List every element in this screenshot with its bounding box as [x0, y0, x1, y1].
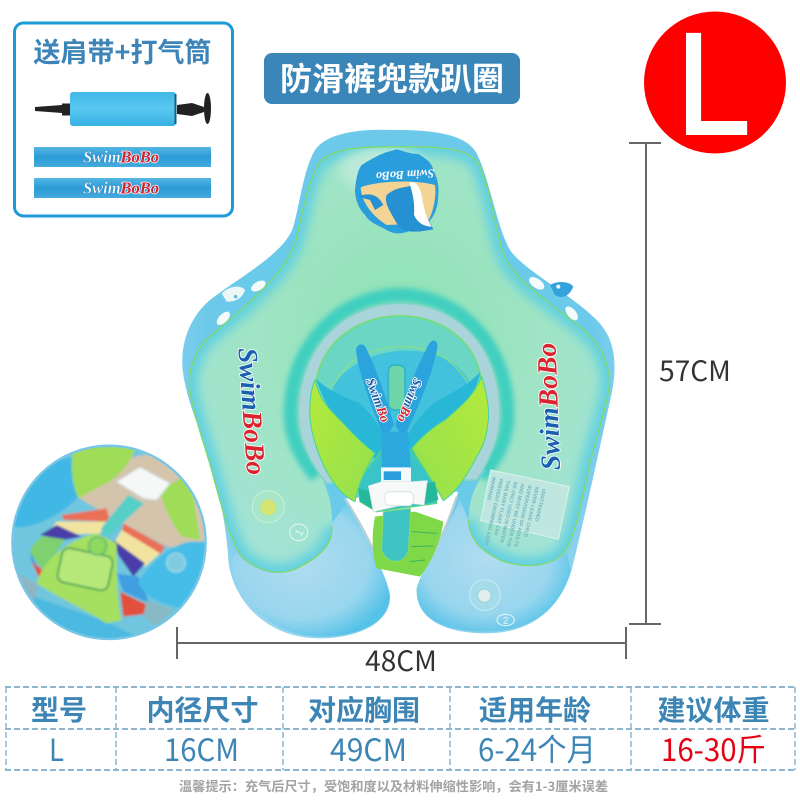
small dolphin left: [222, 287, 245, 302]
table value row: 49CM: [330, 725, 407, 770]
float outer body: [182, 130, 615, 638]
accessories heading: 送肩带+打气筒: [34, 31, 211, 70]
size badge L: [644, 4, 786, 165]
white buckle: [117, 467, 170, 500]
table header row: 内径尺寸: [146, 689, 259, 729]
warning label: [475, 470, 569, 556]
right leg translucent edge: [428, 497, 457, 563]
trunks yellow band right: [115, 530, 160, 567]
table header row: 型号: [31, 689, 87, 729]
table header row: 对应胸围: [308, 689, 420, 729]
swim float product: [182, 130, 615, 638]
cloud left top: [249, 278, 267, 294]
shoulder strap 2: SwimBoBo: [83, 178, 159, 198]
warning label: THIS BABY FLOAT CAN: [492, 480, 511, 536]
logo dolphin small: [357, 194, 383, 210]
left webbing: [358, 488, 373, 508]
width dimension 48CM: [177, 627, 626, 680]
behind-buckle teal backing: [358, 450, 437, 512]
trunks red band upper: [62, 508, 110, 522]
trunks green band left: [30, 536, 65, 570]
dolphin logo: [355, 149, 439, 233]
trunks red band right: [122, 523, 165, 555]
left chamber number 1: [290, 524, 308, 541]
right green cushion: [412, 377, 489, 501]
logo dolphin belly: [409, 182, 432, 227]
trunks yellow band left: [47, 522, 107, 535]
right strap brand text: SwimBo: [394, 376, 425, 425]
shoulder strap 1: [34, 147, 211, 167]
footnote: 温馨提示：充气后尺寸，受饱和度以及材料伸缩性影响，会有1-3厘米误差: [179, 776, 608, 795]
left leg translucent edge: [345, 498, 380, 567]
left brand text: SwimBoBo: [232, 347, 272, 476]
teal strap: [101, 495, 144, 536]
left strap brand text: SwimBo: [363, 376, 393, 424]
warning label: NEVER LEAVE CHILD: [522, 486, 539, 538]
float valve: [167, 553, 185, 572]
cloud left bottom: [214, 309, 232, 327]
lower right grey water: [143, 600, 173, 627]
table value row: [49, 725, 766, 770]
soft edge glow inside panel: [189, 147, 609, 572]
seat interior: [315, 316, 482, 483]
trunks purple band left: [40, 525, 82, 540]
warning label: WARNING: [485, 476, 497, 501]
warning label: UNATTENDED: [533, 488, 547, 523]
seat opening ring: [298, 303, 500, 483]
cloud right top: [527, 275, 546, 292]
trunks blue band left: [30, 552, 36, 566]
right brand text: SwimBoBo: [531, 342, 566, 471]
flap snap: [89, 537, 107, 555]
height dimension 57CM: [629, 143, 731, 624]
green inner panel: [189, 147, 609, 572]
width dimension 48CM: 48CM: [365, 640, 437, 680]
icon: air pump: [35, 92, 211, 126]
flap stitch lines: [410, 532, 437, 562]
green panel stroke: [189, 147, 609, 572]
title banner: 防滑裤兜款趴圈: [280, 54, 504, 100]
logo dolphin: [386, 185, 433, 232]
left V strap: [356, 344, 394, 435]
green flap: [37, 533, 122, 623]
lower water: [32, 596, 134, 638]
table header row: 建议体重: [657, 689, 770, 729]
inset photo: crotch strap in use: [11, 444, 207, 640]
right V strap: [395, 341, 438, 433]
trunks purple band right: [113, 540, 145, 577]
specification table: [5, 687, 796, 770]
flap pocket: [56, 547, 114, 592]
shoulder strap 1: SwimBoBo: [83, 148, 159, 166]
right teal frill: [408, 372, 481, 463]
green crotch flap: [373, 512, 443, 577]
small dolphin right: [550, 282, 573, 297]
table value row: 6-24个月: [478, 725, 596, 770]
height dimension 57CM: 57CM: [659, 350, 731, 390]
table header row: [31, 689, 770, 729]
table value row: 16CM: [164, 725, 239, 770]
size badge L: L: [676, 4, 750, 165]
logo upside-down brand: Swim BoBo: [376, 166, 435, 183]
right chamber number 2: [497, 614, 514, 627]
left teal frill: [316, 378, 383, 463]
torso skin: [77, 450, 207, 550]
table header row: 适用年龄: [479, 689, 591, 729]
centre strap: [382, 432, 411, 468]
grey ground left: [19, 574, 38, 601]
right leg shade: [417, 500, 571, 632]
seat inner arc: [329, 347, 470, 393]
blue float lower right: [138, 542, 213, 608]
shoulder strap 2: [34, 178, 211, 198]
cloud right bottom: [563, 304, 580, 323]
left green cushion: [310, 380, 375, 502]
seat mesh centre: [330, 350, 470, 450]
trunks red band lower right: [120, 592, 150, 617]
table value row: 16-30斤: [661, 725, 766, 770]
table value row: L: [49, 725, 64, 770]
right valve: [470, 580, 500, 610]
lower teal strap: [382, 508, 411, 561]
panel: accessories: [14, 23, 232, 216]
right webbing: [425, 482, 438, 503]
left valve: [252, 491, 284, 523]
right chamber number 2: 2: [503, 616, 509, 627]
warning label: PREVENT DROWNING KEEP: [482, 478, 504, 546]
blue float upper left: [10, 457, 78, 527]
trunks blue band right: [117, 573, 150, 603]
green cushion top: [72, 447, 137, 498]
warning label: BE ONLY USED IN WATER: [498, 481, 518, 544]
green cushion right: [160, 473, 200, 540]
logo sand patch: [361, 181, 435, 225]
buckle: [368, 467, 427, 512]
seat slot: [388, 365, 405, 410]
left chamber number 1: 1: [293, 527, 307, 539]
left leg shade: [230, 503, 389, 637]
warning label: AND MUST BE UNDER THE: [505, 483, 525, 548]
warning label: SUPERVISION OF ADULTS: [512, 484, 532, 548]
trunks red band lower left: [32, 562, 43, 577]
